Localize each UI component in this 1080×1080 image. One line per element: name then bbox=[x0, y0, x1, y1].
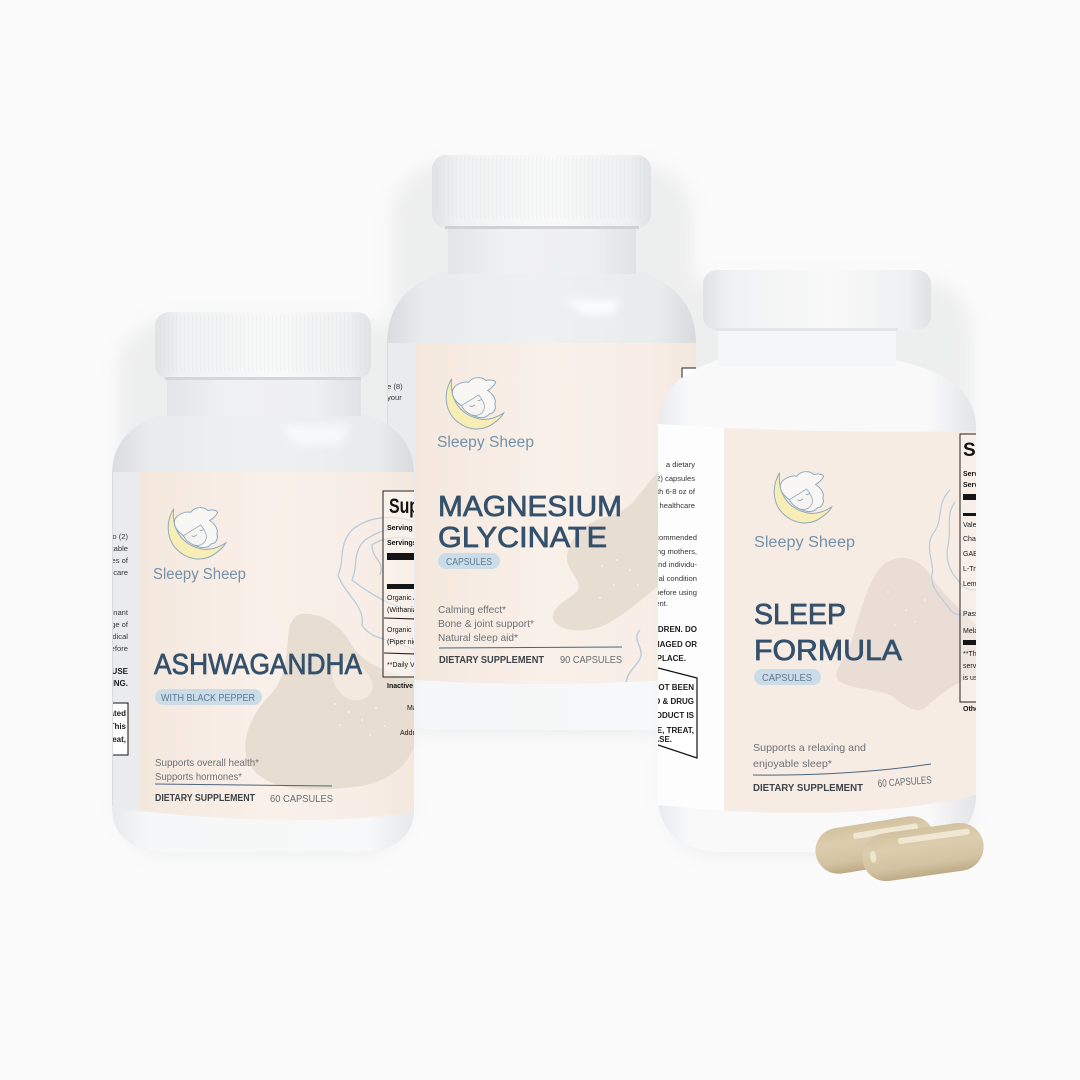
warning box bbox=[113, 702, 128, 756]
claims: Natural sleep aid* bbox=[438, 632, 518, 644]
bottle body bbox=[387, 270, 696, 730]
warning box: n. This bbox=[100, 722, 127, 731]
supplement facts panel: Organic Ash bbox=[387, 595, 425, 602]
claims bbox=[438, 604, 534, 644]
supplement facts panel: Melaton bbox=[963, 628, 988, 635]
bottle: magnesium glycinate bbox=[387, 155, 702, 730]
product title: SLEEP bbox=[754, 599, 846, 631]
supplement facts panel: **Daily Value bbox=[387, 662, 427, 669]
product title: MAGNESIUM bbox=[438, 491, 622, 523]
supplement facts panel: **The bbox=[963, 651, 981, 658]
warning box: uated bbox=[105, 709, 126, 718]
lighter blob inset bbox=[332, 661, 373, 700]
dietary supplement: DIETARY SUPPLEMENT bbox=[439, 655, 544, 666]
shoulder highlight bbox=[280, 425, 350, 445]
side directions text: ent. bbox=[655, 599, 668, 608]
capsule back bbox=[812, 813, 938, 877]
bottle body bbox=[112, 412, 414, 852]
side text: table bbox=[112, 544, 128, 553]
pill tag: CAPSULES bbox=[762, 672, 812, 684]
pill tag bbox=[438, 553, 500, 569]
supplement facts panel: Manu bbox=[407, 705, 425, 712]
supplement facts panel: GABA bbox=[963, 551, 983, 558]
side text: before bbox=[106, 644, 128, 653]
supplement facts panel: Servings Per bbox=[387, 540, 430, 547]
label blob bbox=[837, 558, 976, 710]
side text: e (8) bbox=[387, 382, 403, 391]
bottle foot bbox=[387, 676, 696, 730]
bottle: ashwagandha bbox=[112, 312, 414, 848]
fda disclaimer box: NOT BEEN bbox=[653, 683, 694, 692]
side directions text: recommended bbox=[648, 533, 697, 542]
warning box: treat, bbox=[106, 735, 126, 744]
pill tag: CAPSULES bbox=[446, 556, 492, 568]
cap bbox=[703, 270, 931, 331]
fda disclaimer box: OSE, TREAT, bbox=[645, 726, 694, 735]
side text: OUTUSE bbox=[95, 667, 129, 676]
supplement facts panel: Serving bbox=[963, 471, 989, 478]
supplement facts panel: Su bbox=[963, 440, 987, 461]
cap bbox=[155, 312, 371, 380]
logo bbox=[774, 472, 832, 523]
side directions text: ry healthcare bbox=[651, 501, 695, 510]
bottle: sleep formula bbox=[658, 270, 976, 850]
warning text: DAMAGED OR bbox=[641, 640, 697, 649]
neck bbox=[448, 226, 636, 274]
side text: healthcare bbox=[93, 568, 128, 577]
supplement facts panel: (Piper nigr bbox=[387, 639, 420, 646]
fda disclaimer box bbox=[658, 667, 698, 759]
product title: ASHWAGANDHA bbox=[154, 649, 363, 681]
neck bbox=[718, 326, 896, 366]
supplement facts panel: L-Tryp bbox=[963, 566, 983, 573]
supplement facts panel: Sup bbox=[389, 495, 419, 518]
pill tag bbox=[754, 669, 821, 685]
claims bbox=[155, 757, 259, 783]
logo bbox=[168, 508, 226, 559]
capsules bbox=[812, 813, 987, 884]
supplement facts panel: is used bbox=[963, 675, 985, 682]
claims: Bone & joint support* bbox=[438, 618, 534, 630]
side directions text: 8, and individu- bbox=[645, 560, 697, 569]
claims: Supports overall health* bbox=[155, 757, 259, 769]
brand name: Sleepy Sheep bbox=[437, 434, 534, 451]
supplement facts panel: Passion bbox=[963, 611, 988, 618]
product title: GLYCINATE bbox=[438, 522, 607, 554]
side text: age of bbox=[107, 620, 129, 629]
soft shadows behind bottles bbox=[118, 165, 972, 855]
label bbox=[658, 424, 976, 813]
product title bbox=[754, 599, 903, 667]
side directions text: ing mothers, bbox=[655, 547, 697, 556]
warning text: DRY PLACE. bbox=[638, 654, 686, 663]
supplement facts panel: Inactive Ing bbox=[387, 683, 426, 690]
supplement facts panel bbox=[960, 434, 976, 711]
capsule count: 60 CAPSULES bbox=[877, 774, 932, 790]
warning text bbox=[658, 626, 697, 661]
supplement facts panel: (Withania s bbox=[387, 607, 423, 614]
claims: Supports hormones* bbox=[155, 771, 242, 783]
capsule count: 90 CAPSULES bbox=[560, 654, 622, 666]
side directions text bbox=[658, 462, 697, 606]
brand name: Sleepy Sheep bbox=[153, 566, 246, 583]
capsule count: 60 CAPSULES bbox=[270, 793, 333, 805]
supplement facts panel: Chamo bbox=[963, 536, 986, 543]
facts box bbox=[682, 368, 696, 378]
supplement facts panel: Other bbox=[963, 706, 982, 713]
supplement facts panel: Valerian bbox=[963, 522, 988, 529]
side directions text: or before using bbox=[646, 588, 697, 597]
label blob bbox=[553, 470, 660, 630]
fda disclaimer box: RODUCT IS bbox=[650, 711, 695, 720]
neck bbox=[167, 376, 361, 416]
fda disclaimer box: D & DRUG bbox=[654, 697, 694, 706]
contour lines bbox=[929, 490, 976, 615]
supplement facts panel: serving bbox=[963, 663, 986, 670]
side text: MISSING. bbox=[92, 679, 128, 688]
side text: doses of bbox=[99, 556, 129, 565]
side text bbox=[113, 534, 128, 686]
claims: Calming effect* bbox=[438, 604, 506, 616]
supplement facts panel: Serving bbox=[963, 482, 989, 489]
footer rule bbox=[155, 784, 332, 786]
blob specks bbox=[334, 703, 386, 736]
dietary supplement: DIETARY SUPPLEMENT bbox=[753, 783, 863, 794]
brand name: Sleepy Sheep bbox=[754, 534, 855, 551]
supplement facts panel: Serving Size bbox=[387, 525, 429, 532]
bottle foot bbox=[112, 806, 414, 852]
pill tag bbox=[155, 689, 262, 705]
supplement facts panel: Address bbox=[400, 730, 426, 737]
fda disclaimer box: ASE. bbox=[653, 735, 672, 744]
label blob bbox=[245, 614, 415, 790]
footer rule bbox=[439, 647, 622, 648]
side text: pregnant bbox=[98, 608, 129, 617]
capsule front bbox=[859, 820, 987, 884]
side text: medical bbox=[102, 632, 128, 641]
pill tag: WITH BLACK PEPPER bbox=[161, 692, 255, 704]
side directions text: a dietary bbox=[666, 460, 695, 469]
supplement facts panel: Lemon bbox=[963, 581, 985, 588]
claims bbox=[753, 742, 866, 770]
bottle body bbox=[658, 360, 976, 852]
side directions text: ical condition bbox=[653, 574, 697, 583]
side directions text: two (2) capsules bbox=[640, 474, 695, 483]
claims: Supports a relaxing and bbox=[753, 742, 866, 754]
blob specks bbox=[599, 559, 639, 599]
blob specks bbox=[887, 591, 926, 626]
warning text: CHILDREN. DO bbox=[639, 625, 697, 634]
product title bbox=[438, 491, 622, 554]
supplement facts panel bbox=[382, 490, 414, 735]
side text line two: your bbox=[387, 393, 402, 402]
footer rule bbox=[753, 764, 931, 775]
cap bbox=[432, 155, 651, 229]
blue squiggle bbox=[626, 630, 641, 682]
product title: FORMULA bbox=[754, 635, 903, 667]
logo bbox=[446, 378, 504, 429]
side text: to (2) bbox=[110, 532, 128, 541]
label bbox=[113, 472, 414, 820]
dietary supplement: DIETARY SUPPLEMENT bbox=[155, 793, 255, 804]
label bbox=[387, 343, 702, 688]
side directions text: with 6-8 oz of bbox=[649, 487, 696, 496]
shoulder highlight bbox=[563, 300, 620, 315]
claims: enjoyable sleep* bbox=[753, 758, 832, 770]
supplement facts panel: Organic Bl bbox=[387, 627, 420, 634]
contour lines bbox=[338, 517, 415, 650]
